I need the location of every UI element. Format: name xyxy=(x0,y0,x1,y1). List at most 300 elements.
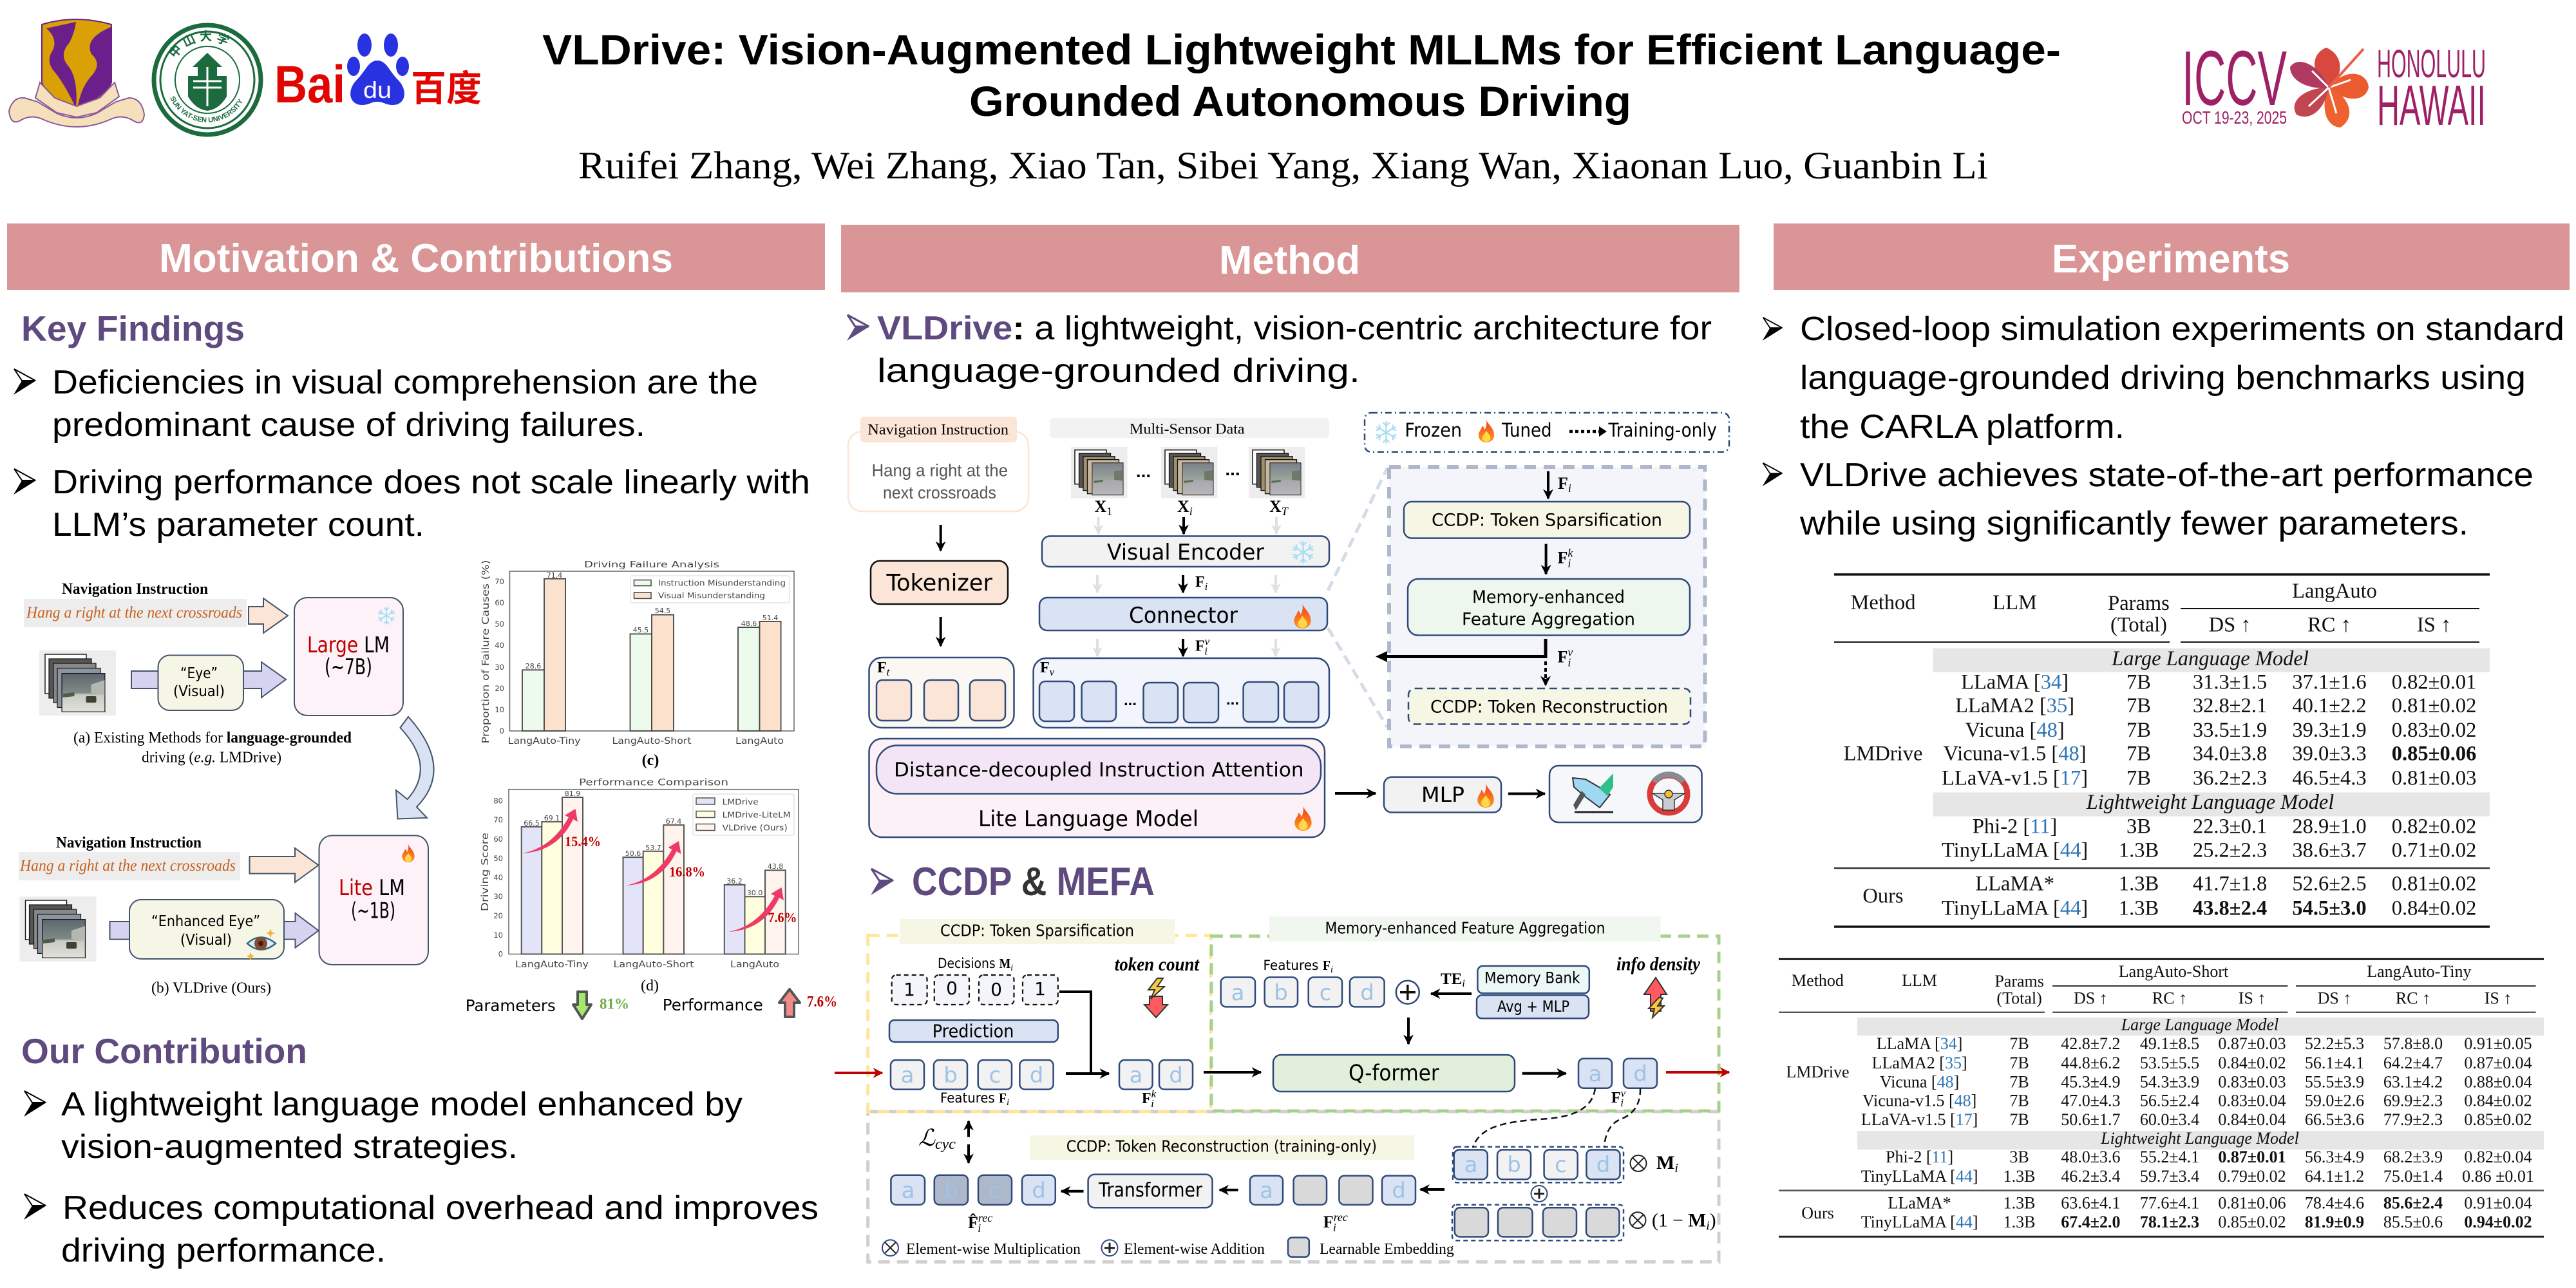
merged tokens xyxy=(1250,1176,1416,1234)
row: ours TinyLLaMA xyxy=(1942,897,2476,920)
panel: connector detail: F xyxy=(1558,474,1568,493)
sparse tokens: d xyxy=(1169,1063,1183,1088)
legend: driving score xyxy=(693,794,794,835)
panel: experiments xyxy=(1763,223,2570,1236)
icon: hibiscus xyxy=(2290,48,2369,128)
row: LLaVA-v1.5 xyxy=(1861,1110,2532,1129)
title: token sparsification: CCDP: Token Sparsification xyxy=(940,922,1134,940)
chart: driving failure analysis xyxy=(480,560,794,769)
row: Phi-2 xyxy=(1973,815,2476,838)
table header: (Total) xyxy=(2110,613,2167,636)
bullet: VLDrive summary: language-grounded driving. xyxy=(877,352,1360,390)
y axis ticks: 30 xyxy=(495,663,504,672)
row: ours TinyLLaMA: 0.85±0.02 xyxy=(2218,1213,2286,1231)
dashed curves: output to masked tokens xyxy=(1473,1088,1640,1148)
bar values: 28.6 xyxy=(526,662,541,670)
logo: Sun Yat-sen University: 中 山 大 学 xyxy=(169,30,229,57)
arrow: instruction to tokenizer xyxy=(940,525,942,551)
row: Vicuna xyxy=(1965,719,2476,742)
row: LLaMA2: 64.2±4.7 xyxy=(2383,1054,2443,1072)
row: LLaMA2: 56.1±4.1 xyxy=(2305,1054,2364,1072)
diagram: VLDrive ours: (b) VLDrive (Ours) xyxy=(151,980,271,997)
table header: LangAuto xyxy=(2292,580,2377,603)
row: LLaMA: 52.2±5.3 xyxy=(2305,1034,2364,1053)
row: TinyLLaMA: 25.2±2.3 xyxy=(2193,839,2267,862)
merged tokens: d xyxy=(1392,1178,1406,1204)
row: LLaMA: LLaMA [34] xyxy=(1961,671,2069,694)
row: Vicuna: 63.1±4.2 xyxy=(2383,1073,2443,1092)
panel: connector detail: F xyxy=(1557,549,1567,567)
row: LLaMA2: 0.84±0.02 xyxy=(2218,1054,2286,1072)
title: token reconstruction: CCDP: Token Reconstruction (training-only) xyxy=(1066,1137,1377,1155)
row: Vicuna-v1.5 xyxy=(1944,743,2476,766)
row: Phi-2: 0.82±0.04 xyxy=(2464,1148,2532,1166)
summary: parameters and performance: 7.6% xyxy=(807,994,837,1010)
bars: driving score xyxy=(522,797,786,954)
table: LangAuto-Short and Tiny results xyxy=(1779,959,2544,1236)
merged tokens: i xyxy=(1333,1221,1336,1234)
table header: RC ↑ xyxy=(2396,989,2430,1008)
cycle loss xyxy=(918,1121,969,1163)
red input arrow xyxy=(835,1072,882,1074)
arrows: connector to visual tokens: i xyxy=(1204,645,1208,658)
y axis ticks: 0 xyxy=(500,726,504,735)
bars: failure causes xyxy=(522,579,781,731)
row: Phi-2: 48.0±3.6 xyxy=(2061,1148,2121,1166)
authors: Ruifei Zhang, Wei Zhang, Xiao Tan, Sibei Yang, Xiang Wan, Xiaonan Luo, Guanbin Li xyxy=(578,144,1988,187)
multi-sensor data: X xyxy=(1177,497,1189,516)
y axis ticks: 10 xyxy=(493,931,503,940)
feature tokens: b xyxy=(943,1063,958,1088)
chart: performance comparison: LangAuto xyxy=(730,960,779,970)
table: LangAuto-Short and Tiny results: Ours xyxy=(1801,1204,1834,1222)
chart: driving failure analysis: Driving Failure Analysis xyxy=(584,560,719,570)
logo: ICCV Honolulu Hawaii: OCT 19-23, 2025 xyxy=(2182,108,2287,128)
logo: ICCV Honolulu Hawaii: ICCV xyxy=(2182,34,2287,122)
zoom lines from connector xyxy=(1328,468,1387,727)
bar values: 36.2 xyxy=(726,877,743,886)
legend: frozen tuned training-only: Tuned xyxy=(1501,419,1552,441)
row: Vicuna-v1.5: Vicuna-v1.5 [48] xyxy=(1862,1091,1976,1110)
masked tokens group xyxy=(1453,1147,1678,1182)
merged tokens: rec xyxy=(1334,1211,1348,1224)
diagram: VLDrive ours: “Enhanced Eye” xyxy=(151,913,260,930)
info density: info density xyxy=(1616,953,1701,974)
table: LangAuto-Short and Tiny results: Lightweight Language Model xyxy=(2100,1129,2299,1148)
y axis ticks: 60 xyxy=(493,835,503,844)
arrow: model to MLP xyxy=(1335,792,1376,795)
diagram: VLDrive ours: (~1B) xyxy=(351,898,395,923)
diagram: VLDrive ours xyxy=(19,835,428,997)
masked tokens group: M xyxy=(1656,1152,1674,1173)
table header: IS ↑ xyxy=(2417,613,2451,636)
text features Ft: t xyxy=(887,666,891,678)
diagram: VLDrive ours: Hang a right at the next crossroads xyxy=(19,857,236,875)
bullet: lightweight model: A lightweight language model enhanced by xyxy=(61,1086,743,1123)
bullet: simulation experiments xyxy=(1763,310,2564,446)
panel: token reconstruction xyxy=(868,1112,1719,1262)
logo: CUHK crest xyxy=(9,19,144,127)
row: Vicuna-v1.5: 0.84±0.02 xyxy=(2464,1091,2532,1110)
row: LLaVA-v1.5: LLaVA-v1.5 [17] xyxy=(1942,767,2088,790)
feature tokens: c xyxy=(989,1063,1001,1088)
y axis ticks: 40 xyxy=(495,641,504,650)
chart: performance comparison: LangAuto-Tiny xyxy=(515,960,589,970)
panel: connector detail: F xyxy=(1557,648,1567,666)
row: LLaMA2: 7B xyxy=(2126,694,2151,717)
diagram: VLDrive ours: Navigation Instruction xyxy=(56,835,202,851)
title: VLDrive: Vision-Augmented Lightweight MLLMs for Efficient Language- xyxy=(542,26,2061,73)
panel: token sparsification xyxy=(835,919,1211,1112)
row: LLaVA-v1.5 xyxy=(1942,767,2476,790)
transformer: Transformer xyxy=(1098,1179,1203,1202)
reconstructed tokens: b xyxy=(944,1178,958,1204)
reconstructed tokens: rec xyxy=(978,1211,992,1224)
legend: frozen tuned training-only: Frozen xyxy=(1405,419,1462,441)
y axis ticks: 80 xyxy=(493,796,503,805)
arrow: time embedding: i xyxy=(1462,978,1465,989)
bullet: reduced overhead: Reduces computational overhead and improves xyxy=(62,1189,819,1227)
panel: connector detail: i xyxy=(1567,556,1571,569)
row: ours TinyLLaMA: 1.3B xyxy=(2119,897,2159,920)
bullet: performance scaling xyxy=(14,464,810,544)
masked tokens group: d xyxy=(1596,1152,1610,1178)
chart: performance comparison: (d) xyxy=(641,978,659,994)
feature tokens xyxy=(891,1060,1054,1108)
multi-sensor data: X xyxy=(1095,497,1106,516)
row: Vicuna-v1.5: 69.9±2.3 xyxy=(2383,1091,2443,1110)
logo: Baidu: 百度 xyxy=(411,68,482,109)
bullet: VLDrive summary xyxy=(847,310,1712,390)
row: LLaVA-v1.5: 36.2±2.3 xyxy=(2193,767,2267,790)
row: TinyLLaMA xyxy=(1861,1167,2534,1186)
row: LLaMA: 7B xyxy=(2009,1034,2029,1053)
chart: driving failure analysis: Proportion of Failure Causes (%) xyxy=(480,560,491,743)
row: LLaMA: LLaMA [34] xyxy=(1877,1034,1962,1053)
panel: memory-enhanced feature aggregation xyxy=(1204,916,1729,1111)
row: LLaMA2: 40.1±2.2 xyxy=(2292,694,2367,717)
diagram: existing methods xyxy=(24,581,403,766)
output tokens: F xyxy=(1611,1090,1621,1106)
row: ours TinyLLaMA: 54.5±3.0 xyxy=(2292,897,2367,920)
arrows: improvement xyxy=(522,809,784,932)
chart: driving failure analysis: LangAuto-Short xyxy=(612,736,692,746)
feature tokens: d xyxy=(1030,1063,1043,1088)
bar values: 45.5 xyxy=(633,626,649,634)
row: Vicuna: 55.5±3.9 xyxy=(2305,1073,2364,1092)
visual encoder xyxy=(1042,536,1329,567)
row: LLaMA: 37.1±1.6 xyxy=(2292,671,2367,694)
arrows: connector to visual tokens: F xyxy=(1195,638,1205,655)
bullet: visual deficiencies xyxy=(14,364,758,444)
row: ours LLaMA: 0.81±0.06 xyxy=(2218,1194,2286,1213)
chart: driving failure analysis: LangAuto-Tiny xyxy=(507,736,581,746)
transformer xyxy=(1088,1175,1212,1208)
row: Phi-2: Phi-2 [11] xyxy=(1886,1148,1953,1166)
row: LLaMA: 42.8±7.2 xyxy=(2061,1034,2121,1053)
row: LLaMA2: 53.5±5.5 xyxy=(2140,1054,2199,1072)
table: LangAuto-Short and Tiny results: LMDrive xyxy=(1786,1063,1850,1081)
tokenizer xyxy=(871,561,1008,604)
feature tokens: Features F xyxy=(940,1090,1007,1106)
legend: driving score: VLDrive (Ours) xyxy=(723,822,788,832)
row: ours LLaMA: 78.4±4.6 xyxy=(2305,1194,2364,1213)
Q-former: Q-former xyxy=(1349,1060,1439,1086)
visual features Fv: ... xyxy=(1226,691,1239,708)
row: ours LLaMA: 63.6±4.1 xyxy=(2061,1194,2121,1213)
bar values: 48.6 xyxy=(741,620,757,628)
feature tokens: d xyxy=(1360,980,1374,1006)
row: LLaMA2: 44.8±6.2 xyxy=(2061,1054,2121,1072)
masked tokens group: b xyxy=(1507,1152,1521,1178)
multi-sensor data: T xyxy=(1282,505,1289,518)
multi-sensor data: X xyxy=(1269,497,1282,516)
heading: experiments xyxy=(1774,223,2570,290)
row: Vicuna-v1.5: 0.83±0.04 xyxy=(2218,1091,2286,1110)
cycle loss: cyc xyxy=(935,1136,956,1153)
row: Vicuna: 0.83±0.03 xyxy=(2218,1073,2286,1092)
row: TinyLLaMA: 46.2±3.4 xyxy=(2061,1167,2121,1186)
row: ours LLaMA xyxy=(1888,1194,2532,1213)
panel: connector detail: i xyxy=(1567,656,1571,668)
bar values: 50.6 xyxy=(625,849,641,858)
bullet: simulation experiments: language-grounded driving benchmarks using xyxy=(1800,359,2526,397)
reconstructed tokens: d xyxy=(1032,1178,1046,1204)
row: LLaMA2: 0.81±0.02 xyxy=(2392,694,2476,717)
row: ours LLaMA: 1.3B xyxy=(2119,872,2159,895)
Q-former xyxy=(1273,1055,1515,1092)
arrow: tokenizer to Ft xyxy=(940,617,942,646)
table: LangAuto results xyxy=(1834,574,2490,927)
row: TinyLLaMA xyxy=(1942,839,2476,862)
table header: IS ↑ xyxy=(2485,989,2512,1008)
improvement labels xyxy=(565,833,797,925)
decisions: i xyxy=(1010,963,1013,973)
row: ours LLaMA: 0.81±0.02 xyxy=(2392,872,2476,895)
bullet: performance scaling: LLM’s parameter count. xyxy=(52,506,424,544)
table header: Method xyxy=(1850,591,1916,614)
table header: Method xyxy=(1792,971,1844,990)
subheading: our contribution: Our Contribution xyxy=(21,1031,307,1071)
row: LLaMA2 xyxy=(1872,1054,2532,1072)
row: ours TinyLLaMA: TinyLLaMA [44] xyxy=(1942,897,2088,920)
subheading: key findings: Key Findings xyxy=(21,308,245,348)
chart: performance comparison: LangAuto-Short xyxy=(613,960,694,970)
decisions: 0 xyxy=(946,978,958,999)
bullet: reduced overhead: driving performance. xyxy=(61,1232,386,1269)
row: ours LLaMA: LLaMA* xyxy=(1975,872,2054,895)
row: LLaVA-v1.5: 66.5±3.6 xyxy=(2305,1110,2364,1129)
table header: Params xyxy=(1994,972,2044,990)
reconstructed tokens: c xyxy=(989,1178,1001,1204)
bar values: 51.4 xyxy=(762,614,778,622)
table header: LangAuto-Tiny xyxy=(2367,962,2472,981)
connector xyxy=(1039,598,1327,630)
row: ours TinyLLaMA xyxy=(1861,1213,2532,1231)
red output arrow xyxy=(1666,1071,1729,1074)
selection arrows xyxy=(1059,992,1109,1074)
table header: DS ↑ xyxy=(2074,989,2108,1008)
feature tokens: i xyxy=(1007,1097,1009,1108)
learnable tokens group: i xyxy=(1706,1218,1710,1233)
feature tokens: c xyxy=(1320,980,1331,1006)
legend: operators: Element-wise Multiplication xyxy=(906,1241,1081,1258)
improvement labels: 16.8% xyxy=(669,864,705,880)
summary: parameters and performance: Parameters xyxy=(466,996,556,1015)
row: TinyLLaMA: 1.3B xyxy=(2003,1167,2036,1186)
multi-sensor data: ... xyxy=(1225,459,1240,479)
table header: LangAuto-Short xyxy=(2119,962,2229,981)
y axis ticks xyxy=(493,796,503,958)
title: token sparsification xyxy=(900,919,1175,944)
feature tokens: a xyxy=(901,1063,914,1088)
row: LLaMA xyxy=(1961,671,2476,694)
feature tokens: a xyxy=(1231,980,1244,1006)
row: LLaVA-v1.5: 7B xyxy=(2126,767,2151,790)
row: LLaVA-v1.5: 60.0±3.4 xyxy=(2140,1110,2199,1129)
table header: LLM xyxy=(1902,971,1937,990)
legend: operators xyxy=(882,1238,1454,1258)
row: LLaMA2: LLaMA2 [35] xyxy=(1872,1054,1967,1072)
diagram: existing methods: Navigation Instruction xyxy=(62,581,208,598)
decisions: Decisions M xyxy=(938,956,1012,971)
bar values: 66.5 xyxy=(524,819,540,828)
row: Phi-2: 3B xyxy=(2009,1148,2029,1166)
CCDP token sparsification: CCDP: Token Sparsification xyxy=(1432,510,1662,530)
arrow: time embedding xyxy=(1431,971,1472,994)
lite language model xyxy=(869,739,1325,837)
y axis ticks: 50 xyxy=(493,854,503,863)
row: LLaVA-v1.5: LLaVA-v1.5 [17] xyxy=(1861,1110,1978,1129)
visual features Fv: v xyxy=(1050,666,1055,678)
icon: enhanced eye xyxy=(247,929,276,960)
diagram: navigation instruction: Hang a right at the xyxy=(872,461,1008,480)
table header: DS ↑ xyxy=(2318,989,2351,1008)
row: Vicuna-v1.5: 59.0±2.6 xyxy=(2305,1091,2364,1110)
row: Vicuna-v1.5: 34.0±3.8 xyxy=(2193,743,2267,766)
heading: motivation and contributions: Motivation & Contributions xyxy=(159,236,673,281)
row: TinyLLaMA: 38.6±3.7 xyxy=(2292,839,2367,862)
masked tokens group: c xyxy=(1555,1152,1567,1178)
info density xyxy=(1616,953,1701,1018)
sparse tokens xyxy=(1119,1060,1193,1110)
row: ours TinyLLaMA: 0.94±0.02 xyxy=(2464,1213,2532,1231)
y axis ticks xyxy=(495,577,504,735)
y axis ticks: 40 xyxy=(493,873,503,882)
text features Ft xyxy=(869,658,1014,728)
y axis ticks: 20 xyxy=(495,684,504,693)
heading: CCDP and MEFA: CCDP & MEFA xyxy=(912,860,1155,904)
diagram: navigation instruction xyxy=(848,417,1028,511)
tokenizer: Tokenizer xyxy=(886,570,992,596)
bullet: lightweight model xyxy=(24,1086,743,1166)
title xyxy=(542,26,2061,125)
row: LLaMA: 7B xyxy=(2126,671,2151,694)
bullet: performance scaling: Driving performance does not scale linearly with xyxy=(52,464,810,501)
diagram: navigation instruction: next crossroads xyxy=(883,483,996,502)
diagram: existing methods: Large LM xyxy=(307,632,390,658)
row: Phi-2: 0.87±0.01 xyxy=(2218,1148,2286,1166)
row: ours TinyLLaMA: 0.84±0.02 xyxy=(2392,897,2476,920)
decisions: 1 xyxy=(1034,978,1046,999)
visual features Fv: ... xyxy=(1124,692,1137,709)
feature tokens: i xyxy=(1331,965,1333,975)
row: ours LLaMA: 85.6±2.4 xyxy=(2383,1194,2443,1213)
table: LangAuto results: Lightweight Language Model xyxy=(2086,791,2334,814)
table: LangAuto-Short and Tiny results: Large Language Model xyxy=(2121,1015,2278,1034)
chart: performance comparison xyxy=(479,778,799,994)
row: Phi-2: 55.2±4.1 xyxy=(2140,1148,2199,1166)
row: Vicuna-v1.5: 56.5±2.4 xyxy=(2140,1091,2199,1110)
chart: driving failure analysis: LangAuto xyxy=(735,736,784,746)
row: LLaVA-v1.5: 77.9±2.3 xyxy=(2383,1110,2443,1129)
arrows: connector to visual tokens xyxy=(1097,636,1276,658)
chart: performance comparison: Driving Score xyxy=(479,833,491,911)
table header: RC ↑ xyxy=(2307,613,2351,636)
row: LLaMA: 49.1±8.5 xyxy=(2140,1034,2199,1053)
panel: method xyxy=(835,225,1739,1262)
output tokens: a xyxy=(1589,1061,1602,1087)
memory-enhanced feature aggregation: Feature Aggregation xyxy=(1462,609,1635,629)
lite language model: Lite Language Model xyxy=(978,806,1198,832)
MLP: MLP xyxy=(1421,782,1464,807)
bullet: reduced overhead xyxy=(24,1189,819,1269)
row: Vicuna: 7B xyxy=(2009,1073,2029,1092)
bullet: visual deficiencies: Deficiencies in visual comprehension are the xyxy=(52,364,758,401)
row: ours TinyLLaMA: TinyLLaMA [44] xyxy=(1861,1213,1978,1231)
y axis ticks: 50 xyxy=(495,620,504,629)
diagram: existing methods: “Eye” xyxy=(180,665,218,682)
row: TinyLLaMA: 64.1±1.2 xyxy=(2305,1167,2364,1186)
decisions xyxy=(892,956,1058,1005)
logo: ICCV Honolulu Hawaii xyxy=(2182,34,2486,137)
diagram: navigation instruction: Navigation Instruction xyxy=(867,421,1009,438)
control outputs xyxy=(1549,766,1702,822)
table header: LLM xyxy=(1993,591,2037,614)
row: ours LLaMA: 0.91±0.04 xyxy=(2464,1194,2532,1213)
multi-sensor data: 1 xyxy=(1106,505,1112,518)
legend: driving score: LMDrive xyxy=(723,797,759,806)
row: ours TinyLLaMA: 1.3B xyxy=(2003,1213,2036,1231)
memory bank xyxy=(1477,966,1589,1018)
arrows: encoder to connector: F xyxy=(1195,574,1205,591)
cycle loss: ℒ xyxy=(918,1125,935,1151)
heading: method xyxy=(841,225,1739,292)
feature tokens: Features F xyxy=(1264,958,1331,973)
connector: Connector xyxy=(1129,603,1238,629)
row: ours TinyLLaMA: 67.4±2.0 xyxy=(2061,1213,2121,1231)
bullet: state of the art: while using significantly fewer parameters. xyxy=(1799,505,2468,542)
row: Phi-2: 56.3±4.9 xyxy=(2305,1148,2364,1166)
multi-sensor data: i xyxy=(1189,505,1193,518)
row: TinyLLaMA: 0.71±0.02 xyxy=(2392,839,2476,862)
row: Phi-2 xyxy=(1886,1148,2532,1166)
row: ours LLaMA: 52.6±2.5 xyxy=(2292,872,2367,895)
chart: driving failure analysis: (c) xyxy=(642,752,659,769)
lite language model: Distance-decoupled Instruction Attention xyxy=(894,759,1303,782)
improvement labels: 7.6% xyxy=(768,909,797,925)
title: memory-enhanced feature aggregation xyxy=(1269,916,1661,942)
row: ours TinyLLaMA: 81.9±0.9 xyxy=(2305,1213,2364,1231)
visual encoder: Visual Encoder xyxy=(1107,540,1264,565)
bar values: 71.4 xyxy=(547,571,562,580)
legend: frozen tuned training-only xyxy=(1365,413,1729,452)
row: LLaVA-v1.5: 50.6±1.7 xyxy=(2061,1110,2121,1129)
diagram: existing methods: driving (e.g. LMDrive) xyxy=(142,750,281,766)
row: Vicuna: Vicuna [48] xyxy=(1965,719,2065,742)
icon: pedal and foot xyxy=(1573,773,1613,812)
chart: performance comparison: Performance Comparison xyxy=(579,778,728,788)
